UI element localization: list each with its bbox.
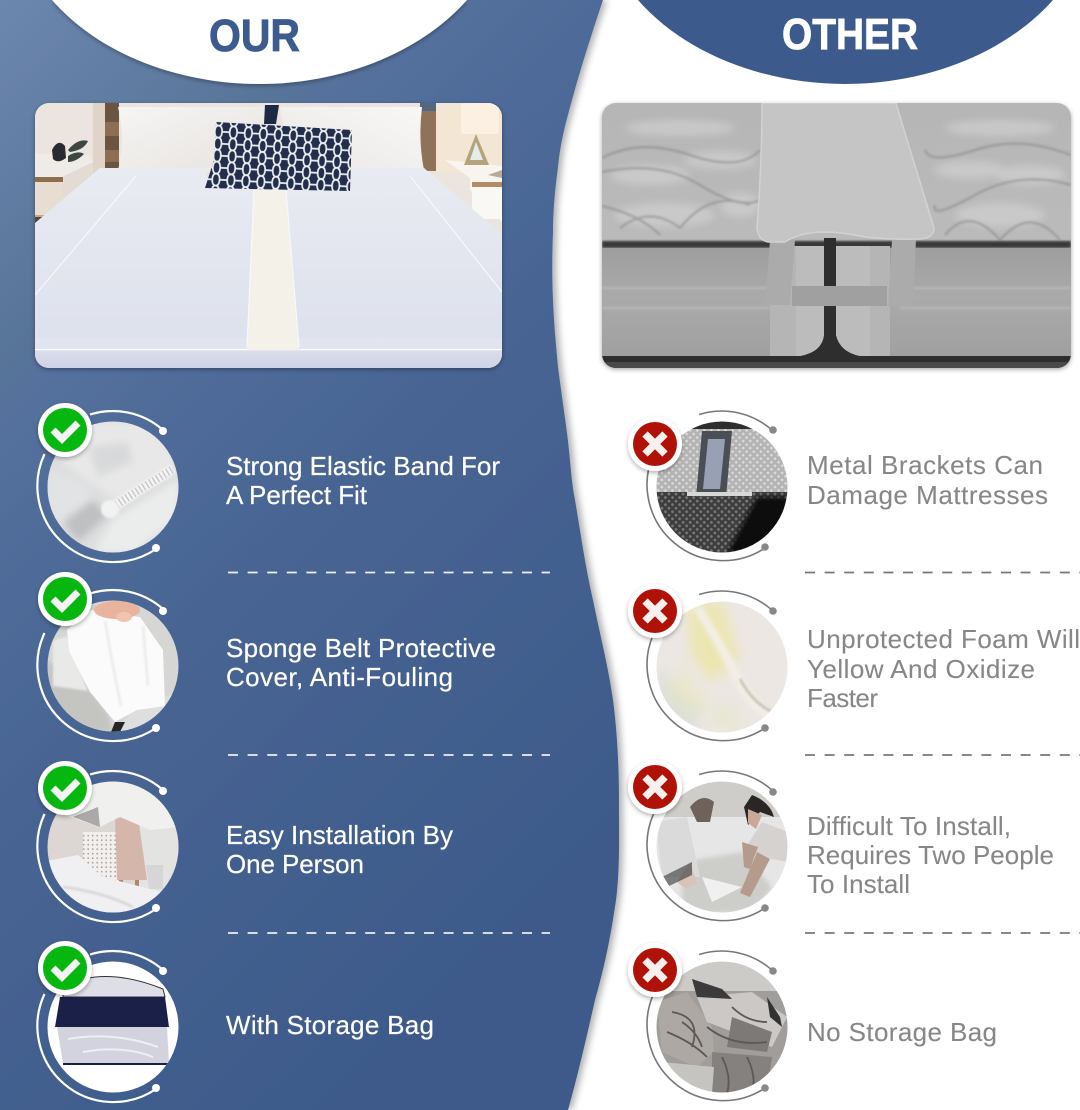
gap filler strip — [247, 190, 299, 350]
photo: sponge belt — [47, 600, 179, 732]
base gap — [602, 285, 1071, 368]
photo: metal bracket — [656, 421, 788, 554]
photo: elastic band — [47, 421, 179, 553]
badge: check — [38, 572, 92, 626]
photo: storage bag — [47, 961, 179, 1093]
headboard wood — [105, 103, 436, 171]
photo: other gap filler on grey mattresses — [602, 103, 1071, 368]
panel: our heading oval — [52, 0, 467, 84]
soft bottom corners — [602, 362, 1071, 368]
icon arcs — [647, 591, 777, 741]
drawback 4: no storage bag — [628, 943, 997, 1101]
front of mattress — [35, 350, 502, 368]
feature 3: one person install — [37, 761, 453, 922]
text: yellowing foam: Yellow And Oxidize — [807, 654, 1035, 684]
text: storage bag: With Storage Bag — [226, 1010, 434, 1040]
text: sponge belt: Cover, Anti-Fouling — [226, 662, 453, 692]
text: one person install — [226, 820, 453, 879]
badge: check — [38, 941, 92, 995]
topper pad — [757, 103, 934, 242]
badge: cross — [628, 417, 682, 471]
topper strap left — [765, 240, 795, 305]
text: yellowing foam: Unprotected Foam Will — [807, 624, 1080, 654]
icon arcs — [647, 411, 777, 561]
panel: our side blue background — [0, 0, 619, 1110]
left nightstand — [35, 162, 93, 223]
text: two person install: Difficult To Install, — [807, 811, 1011, 841]
feature 4: storage bag — [37, 941, 434, 1102]
drawback 2: yellowing foam — [628, 584, 1080, 741]
right nightstand — [445, 160, 502, 222]
text: two person install: To Install — [807, 869, 910, 899]
heading: OTHER: OTHER — [782, 10, 918, 59]
icon arcs — [647, 951, 777, 1101]
text: elastic band: A Perfect Fit — [226, 480, 368, 510]
badge: check — [38, 403, 92, 457]
text: two person install — [807, 811, 1054, 899]
icon arcs — [647, 771, 777, 921]
text: no storage bag: No Storage Bag — [807, 1017, 997, 1047]
lower mattress side — [602, 248, 1071, 356]
feature 2: sponge belt — [37, 572, 496, 741]
icon arcs — [37, 590, 167, 741]
text: metal brackets: Damage Mattresses — [807, 480, 1048, 510]
dark seam — [602, 241, 1071, 248]
quilting seams — [602, 144, 1071, 240]
heading: OUR: OUR — [209, 10, 300, 61]
quilting highlights — [610, 120, 1065, 227]
photo: two people with mattress — [656, 781, 788, 913]
pillows — [118, 105, 424, 172]
topper cross strap — [792, 286, 887, 306]
badge: cross — [628, 584, 682, 638]
text: metal brackets: Metal Brackets Can — [807, 450, 1043, 480]
badge: cross — [628, 760, 682, 814]
text: sponge belt: Sponge Belt Protective — [226, 633, 496, 663]
text: sponge belt — [226, 633, 496, 692]
text: yellowing foam: Faster — [807, 683, 878, 713]
vase and plant — [52, 140, 88, 162]
feature 1: elastic band — [37, 403, 500, 562]
badge: cross — [628, 943, 682, 997]
photo: bed with gap filler — [35, 103, 502, 368]
text: elastic band — [226, 451, 500, 510]
icon arcs — [37, 771, 167, 922]
drawback 3: two person install — [628, 760, 1054, 921]
photo: messy bedding — [656, 961, 788, 1093]
drawback 1: metal brackets — [628, 411, 1048, 561]
text: two person install: Requires Two People — [807, 840, 1054, 870]
table lamp — [461, 103, 499, 165]
mattress top — [35, 168, 502, 345]
gap upper segments — [824, 238, 836, 346]
topper strap right — [888, 240, 916, 306]
text: metal brackets — [807, 450, 1048, 510]
badge: check — [38, 761, 92, 815]
decorative throw pillow — [205, 122, 352, 191]
text: elastic band: Strong Elastic Band For — [226, 451, 500, 481]
icon arcs — [37, 951, 167, 1102]
photo: yellowed foam — [656, 601, 788, 733]
photo: person with duvet — [47, 781, 179, 917]
panel: other heading oval — [638, 0, 1053, 84]
text: yellowing foam — [807, 624, 1080, 713]
icon arcs — [37, 411, 167, 562]
mattress rounded corners — [770, 246, 890, 356]
text: one person install: One Person — [226, 849, 364, 879]
text: one person install: Easy Installation By — [226, 820, 453, 850]
